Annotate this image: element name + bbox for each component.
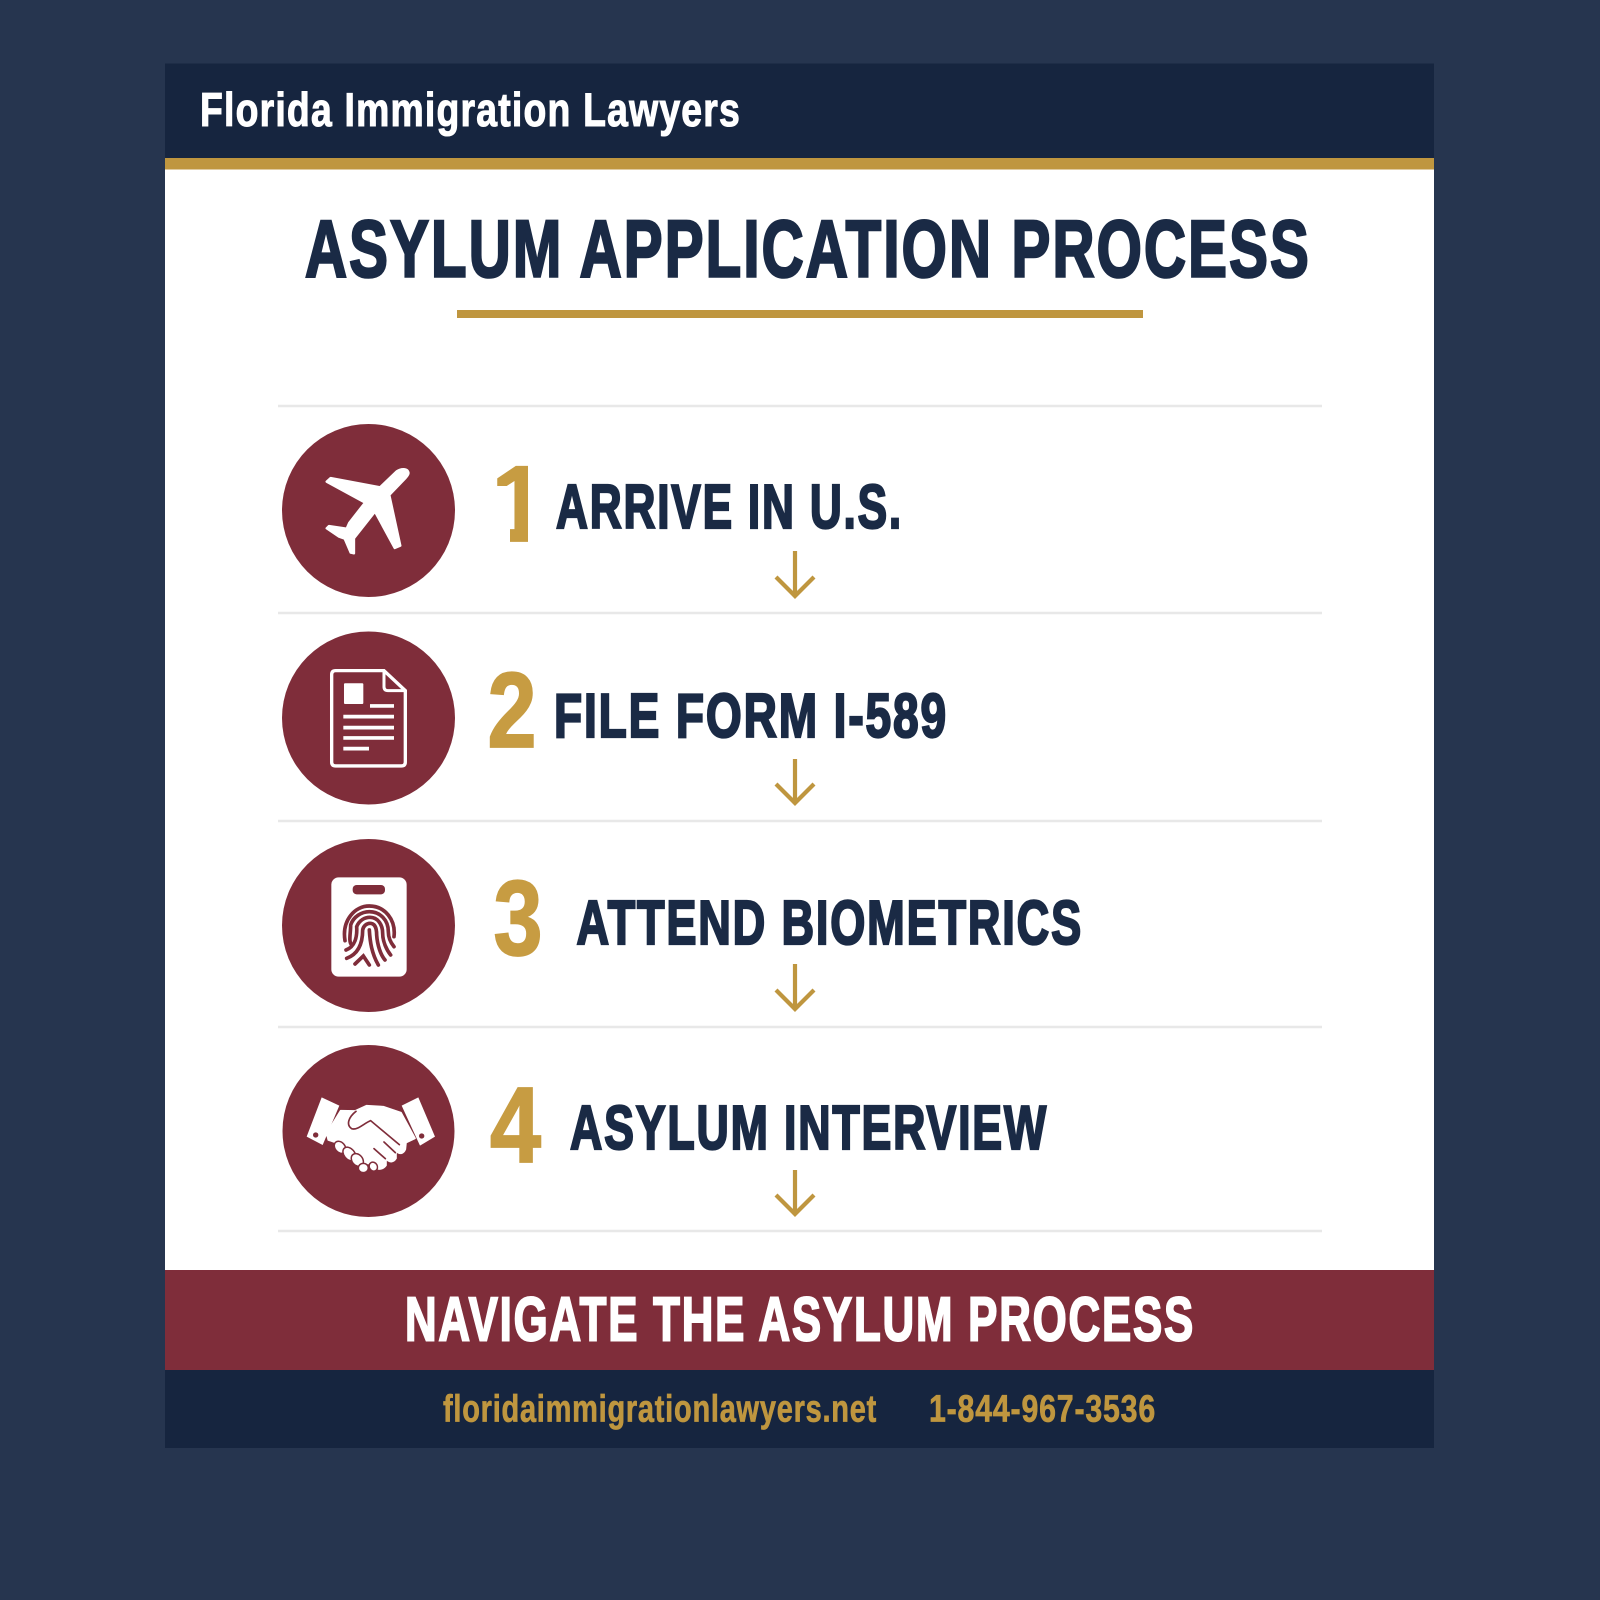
website: floridaimmigrationlawyers.net	[443, 1388, 877, 1430]
header bar	[165, 64, 1434, 170]
icon: handshake	[282, 1045, 454, 1217]
step label: ASYLUM INTERVIEW	[570, 1094, 1048, 1163]
step 2: file form I-589	[282, 632, 948, 804]
footer bar	[165, 1370, 1434, 1448]
arrow	[776, 1170, 814, 1214]
step label: ARRIVE IN U.S.	[556, 473, 903, 542]
icon: document	[282, 632, 455, 804]
arrow	[776, 964, 814, 1009]
icon: fingerprint badge	[282, 839, 455, 1012]
arrow	[776, 551, 814, 596]
step 1: arrive in U.S.	[282, 424, 903, 597]
step label: ATTEND BIOMETRICS	[576, 889, 1083, 958]
step number 2: 2	[488, 650, 536, 770]
call to action banner	[165, 1270, 1434, 1370]
header brand name: Florida Immigration Lawyers	[200, 83, 741, 136]
step number 3: 3	[494, 858, 542, 978]
step 3: attend biometrics	[282, 839, 1083, 1012]
step 4: asylum interview	[282, 1045, 1048, 1217]
title	[305, 204, 1311, 318]
call to action banner: NAVIGATE THE ASYLUM PROCESS	[405, 1286, 1195, 1354]
step label: FILE FORM I-589	[554, 682, 948, 751]
panel: white card	[165, 169, 1434, 1270]
phone number: 1-844-967-3536	[929, 1388, 1156, 1430]
icon: airplane	[282, 424, 455, 597]
infographic	[165, 64, 1434, 1448]
arrow	[776, 759, 814, 803]
step number 1: 1	[491, 443, 549, 564]
step number 4: 4	[490, 1064, 541, 1185]
